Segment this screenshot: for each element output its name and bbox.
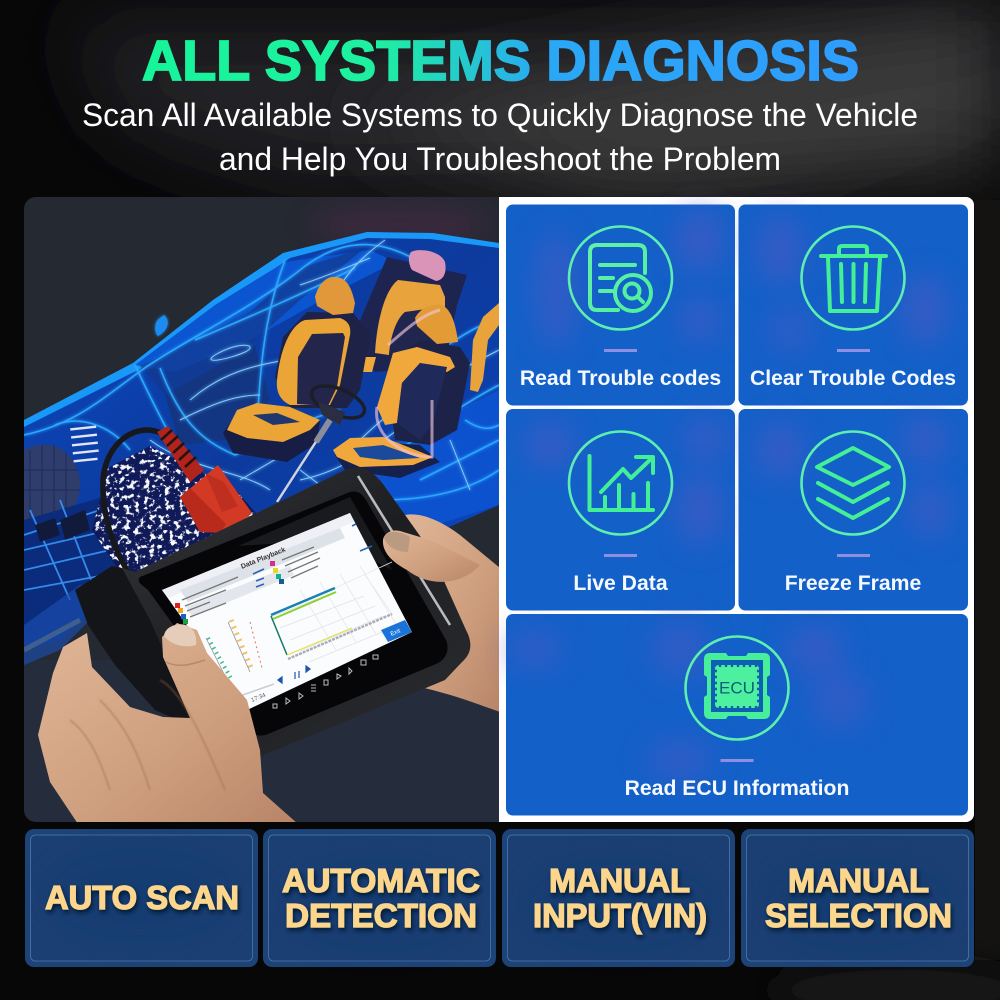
cushion top [227, 403, 320, 442]
headrest [315, 277, 355, 315]
button: manual selection: SELECTION [765, 897, 952, 934]
tile: live data [506, 409, 735, 610]
OBD connector: red [157, 426, 252, 533]
button: manual selection: MANUAL [788, 862, 929, 899]
subtitle: Scan All Available Systems to Quickly Diagnose the Vehicle [82, 97, 918, 133]
tablet: screen [162, 513, 412, 710]
screen: blue value text [253, 524, 372, 587]
screen: line chart [271, 562, 396, 662]
screen: exit button [381, 620, 412, 642]
button: automatic detection: AUTOMATIC [282, 862, 480, 899]
car: third seat at right edge [470, 303, 499, 392]
OBD cable [103, 430, 163, 572]
car: blue x-ray body [24, 232, 499, 528]
tile: read trouble codes [506, 204, 735, 406]
diagnostic tablet [75, 468, 470, 757]
subtitle [82, 97, 918, 177]
cushion base [335, 440, 440, 478]
label: Freeze Frame [785, 572, 922, 595]
label: Read Trouble codes [520, 367, 721, 390]
screen: time label: 17:34 [251, 692, 267, 704]
car: coil spring [70, 427, 99, 461]
car: engine block [92, 446, 256, 572]
tile: clear trouble codes [738, 204, 968, 406]
label: Clear Trouble Codes [750, 367, 956, 390]
screen: colour legend squares [175, 561, 284, 624]
icon: document with magnifier [569, 226, 672, 330]
icon: trash bin [802, 226, 904, 330]
right thumb over tablet [383, 530, 480, 582]
tablet: screen header rows [162, 513, 354, 598]
tablet: silver edge trim [358, 476, 450, 625]
screen title: Data Playback [240, 546, 287, 571]
title: ALL SYSTEMS DIAGNOSIS [142, 29, 859, 93]
icon: rising chart [569, 432, 672, 534]
button: manual input VIN: INPUT(VIN) [533, 897, 707, 934]
label: Read ECU Information [625, 777, 849, 800]
button: auto scan: AUTO SCAN [45, 879, 239, 916]
panel: white feature frame [499, 197, 974, 822]
icon: ECU chip [686, 636, 788, 740]
button: auto scan [25, 829, 258, 967]
headrest [415, 305, 458, 344]
screen: exit button: Exit [390, 628, 402, 638]
screen: grey text rows [182, 547, 320, 617]
button: manual selection [741, 829, 974, 967]
tablet: black bezel [139, 491, 448, 736]
screen: side axis gauges [206, 620, 262, 680]
button: manual input VIN [502, 829, 735, 967]
icon: ECU chip: ECU [719, 678, 755, 698]
right hand behind device [400, 514, 500, 712]
subtitle: and Help You Troubleshoot the Problem [219, 141, 781, 177]
car: suspension and chassis [24, 498, 116, 665]
car: rear seat [353, 250, 467, 372]
cushion top [333, 437, 433, 467]
button: automatic detection: DETECTION [285, 897, 477, 934]
icon: stacked layers [802, 432, 904, 534]
tablet: left grip [75, 566, 192, 722]
button: manual input VIN: MANUAL [549, 862, 690, 899]
cushion base [223, 420, 320, 462]
tablet: android nav icons [273, 655, 378, 708]
car: front wheel [24, 445, 80, 525]
tile: freeze frame [738, 409, 968, 610]
panel: product photo [24, 197, 500, 825]
car: front seat left [223, 277, 370, 462]
screen: playback controls [278, 666, 310, 683]
label: Live Data [573, 572, 668, 595]
screen: playback progress bar [240, 684, 274, 696]
left hand holding tablet [38, 623, 298, 824]
car: steering wheel and column [277, 379, 369, 502]
button: automatic detection [263, 829, 496, 967]
tile: read ECU information [506, 614, 968, 816]
car: front seat right [333, 305, 470, 478]
